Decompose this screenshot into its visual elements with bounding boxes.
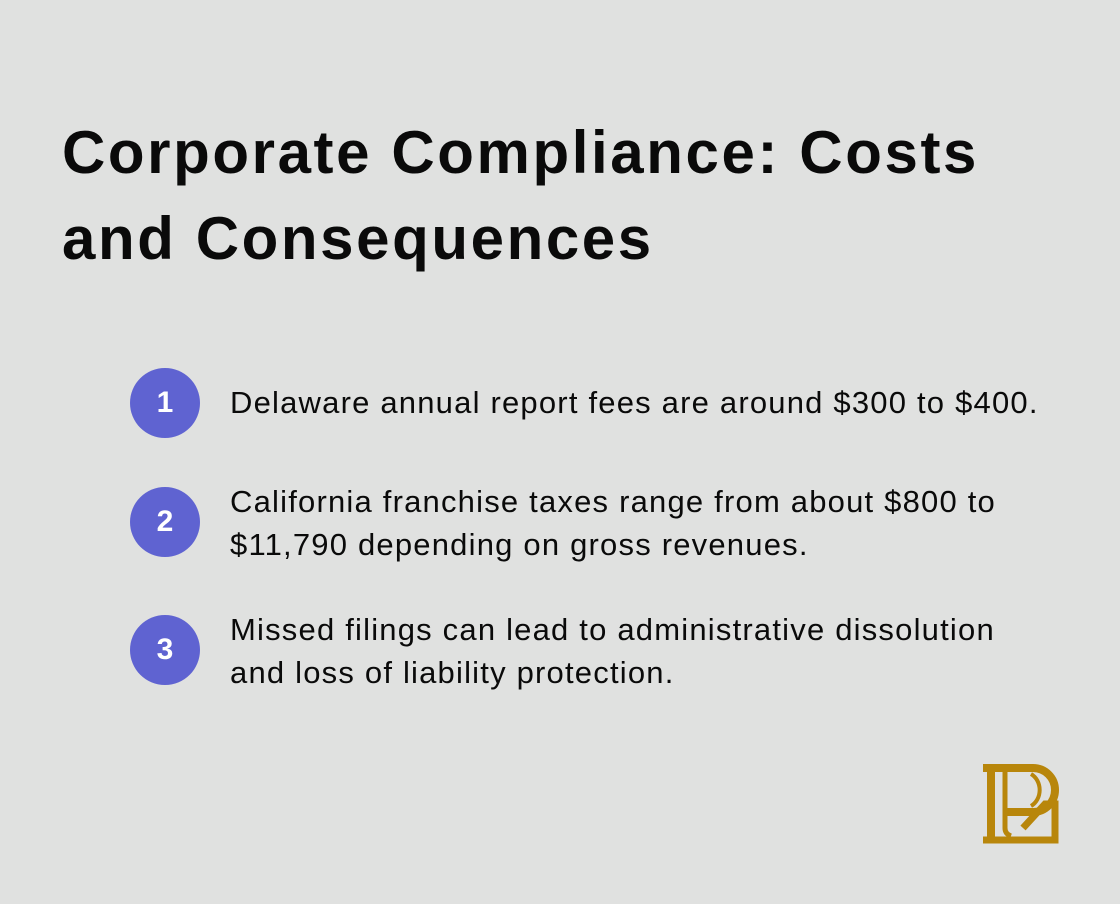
text 1: Delaware annual report fees are around $300 to $400. [230,385,1039,420]
badge 3 [130,615,200,685]
text 2: $11,790 depending on gross revenues. [230,527,809,562]
title: and Consequences [62,205,654,272]
logo [983,764,1059,844]
badge 1: 1 [157,386,173,419]
text 3 [230,612,995,690]
text 2: California franchise taxes range from about $800 to [230,484,996,519]
badge 2 [130,487,200,557]
badge 3: 3 [157,633,173,666]
item 2 [130,484,996,562]
text 3: and loss of liability protection. [230,655,675,690]
badge 1 [130,368,200,438]
item 1 [130,368,1039,438]
title [62,119,979,272]
text 2 [230,484,996,562]
text 3: Missed filings can lead to administrative dissolution [230,612,995,647]
title: Corporate Compliance: Costs [62,119,979,186]
badge 2: 2 [157,505,173,538]
item 3 [130,612,995,690]
